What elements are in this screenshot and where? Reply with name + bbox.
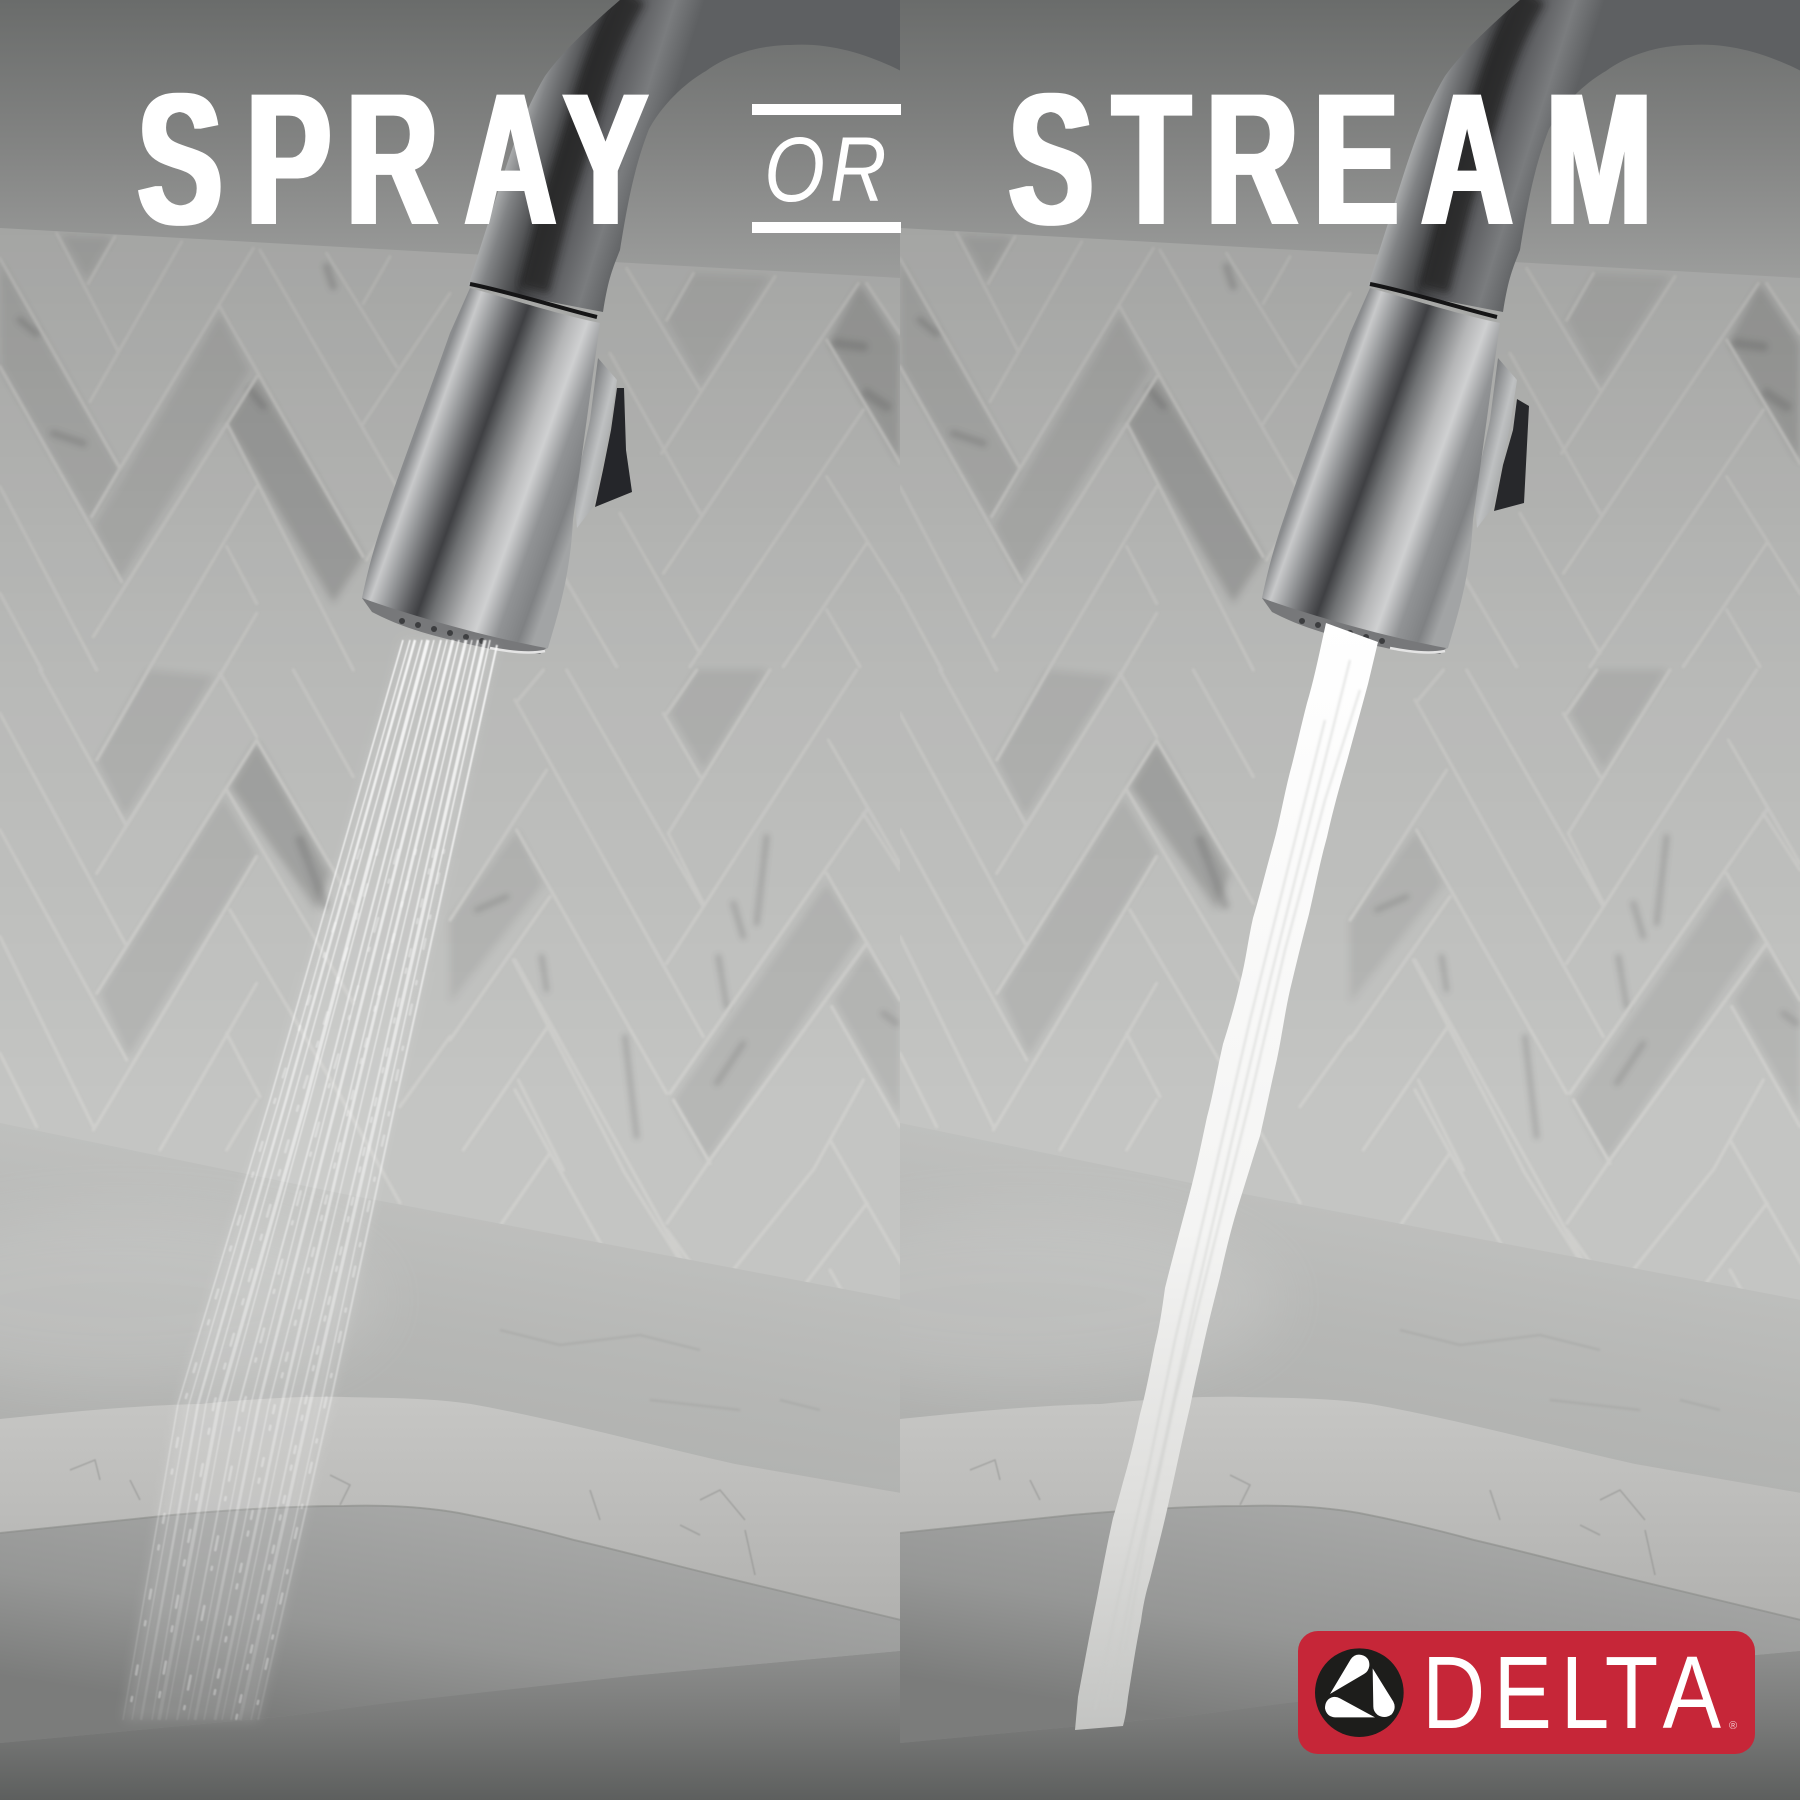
button housing	[574, 358, 617, 528]
aerator nozzles	[399, 618, 485, 644]
counter top	[0, 1123, 901, 1500]
stream column	[1075, 623, 1378, 1730]
counter edge lip	[0, 1397, 901, 1620]
spout neck	[468, 0, 901, 312]
wordmark: DELTA	[1422, 1635, 1721, 1751]
rim highlight	[490, 648, 545, 652]
OR top rule	[752, 104, 901, 115]
head seam	[470, 284, 597, 317]
spray streaks	[123, 640, 497, 1720]
counter highlight	[0, 1210, 380, 1390]
icon: delta circle	[1315, 1648, 1404, 1737]
grout continuation toward counter	[337, 960, 901, 1427]
logo: Delta badge	[1298, 1631, 1755, 1754]
front counter edge	[0, 1651, 901, 1800]
spray head body	[362, 288, 600, 652]
OR text: OR	[764, 119, 886, 221]
faucet	[362, 0, 901, 654]
registered mark: ®	[1729, 1720, 1737, 1732]
stream texture	[1095, 660, 1360, 1710]
spray lever	[595, 388, 632, 507]
water: spray	[123, 640, 497, 1720]
neck dark reflection	[534, 0, 632, 290]
counter veining	[680, 1345, 1597, 1350]
sink basin	[0, 1506, 901, 1743]
panel: stream scene backdrop	[760, 0, 1800, 1800]
sink seam	[0, 1506, 901, 1620]
marble veins	[20, 267, 897, 1137]
darker marble tiles	[0, 235, 900, 1160]
wall shading	[0, 220, 901, 1360]
herringbone grout lines	[0, 233, 901, 1427]
water: solid stream	[1075, 623, 1378, 1730]
red badge	[1298, 1631, 1755, 1754]
connector: OR	[752, 104, 901, 233]
tile wall	[0, 220, 901, 1360]
aerator face	[362, 598, 546, 654]
heading: SPRAY: SPRAY	[137, 54, 648, 265]
OR bottom rule	[752, 222, 901, 233]
spray droplets	[128, 850, 444, 1720]
stream lever	[1494, 399, 1529, 511]
cabinet underside	[0, 0, 901, 278]
panel: spray scene backdrop	[0, 0, 901, 1800]
lip veining	[70, 1460, 755, 1575]
spray haze	[123, 640, 497, 1720]
heading: STREAM: STREAM	[1008, 54, 1652, 265]
